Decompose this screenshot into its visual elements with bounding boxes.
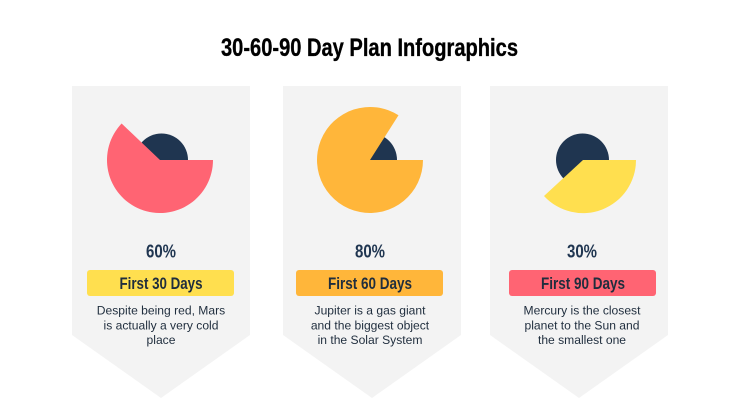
label badge: first 60 days: First 60 Days — [328, 274, 412, 293]
description: mars: Despite being red, Mars — [97, 304, 225, 318]
label badge: first 30 days — [87, 270, 234, 296]
label badge: first 30 days: First 30 Days — [120, 274, 202, 293]
panel: first 90 days — [490, 86, 668, 398]
description: mercury: the smallest one — [538, 333, 626, 347]
percentage: 30%: 30% — [567, 242, 597, 262]
title: 30-60-90 Day Plan Infographics — [221, 34, 518, 62]
panel: first 60 days — [283, 86, 461, 398]
description: jupiter: and the biggest object — [311, 318, 430, 332]
description: mars: is actually a very cold — [104, 318, 218, 332]
pie chart: 30% — [544, 134, 636, 213]
label badge: first 60 days — [296, 270, 443, 296]
percentage: 80%: 80% — [355, 242, 385, 262]
label badge: first 90 days — [509, 270, 656, 296]
panel: first 30 days — [72, 86, 250, 398]
description: mars: place — [147, 333, 176, 347]
pie chart: 60% — [107, 124, 213, 213]
description: jupiter: Jupiter is a gas giant — [315, 304, 426, 318]
description: mercury: planet to the Sun and — [524, 318, 640, 332]
percentage: 60%: 60% — [146, 242, 176, 262]
description: mercury: Mercury is the closest — [524, 304, 641, 318]
pie chart: 80% — [317, 107, 423, 213]
description: jupiter: in the Solar System — [318, 333, 422, 347]
label badge: first 90 days: First 90 Days — [541, 274, 625, 293]
